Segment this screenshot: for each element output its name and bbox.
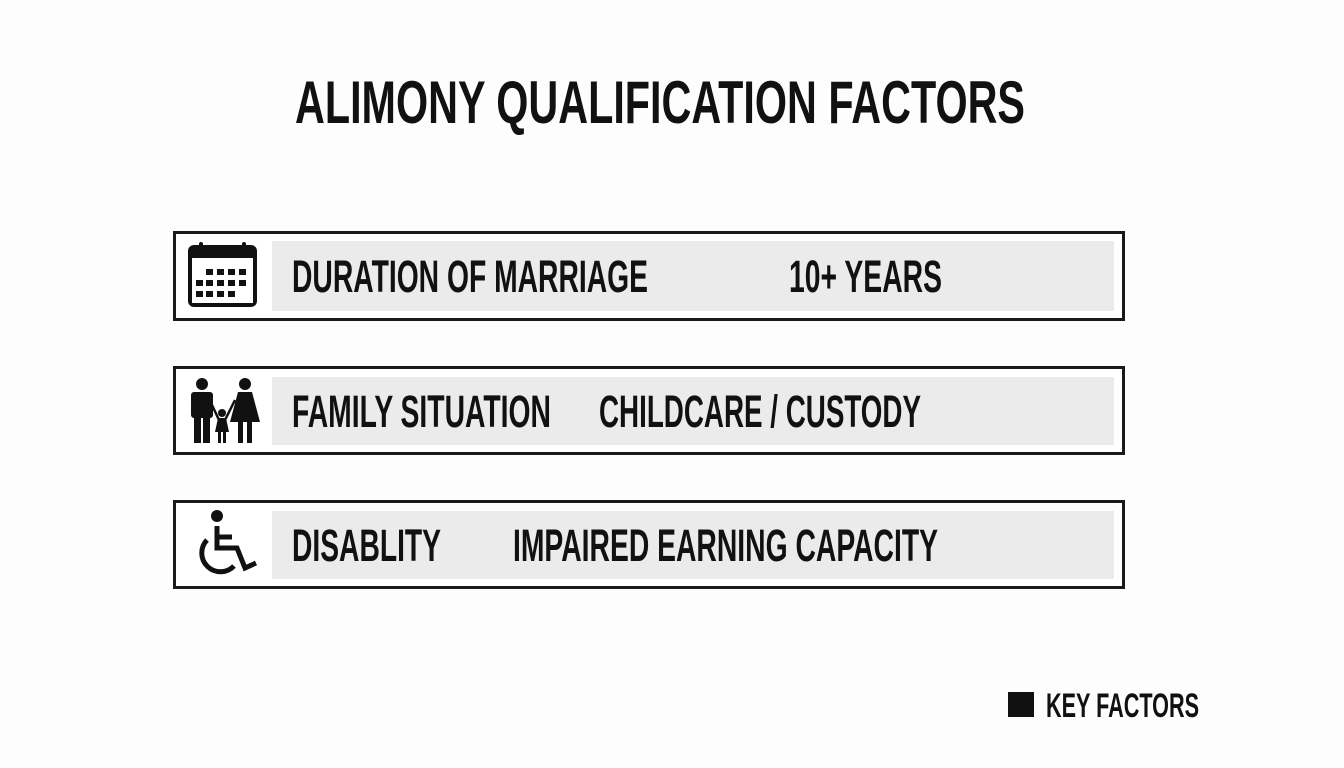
icon: calendar — [188, 242, 257, 307]
value: childcare: CHILDCARE / CUSTODY — [599, 386, 921, 437]
icon: family — [191, 378, 260, 443]
title: ALIMONY QUALIFICATION FACTORS — [295, 69, 1025, 136]
legend — [1008, 687, 1199, 725]
icon: wheelchair — [202, 510, 256, 572]
label: disability: DISABLITY — [292, 520, 441, 571]
value: 10+ years: 10+ YEARS — [789, 251, 942, 302]
legend: KEY FACTORS — [1046, 687, 1199, 725]
label: family: FAMILY SITUATION — [292, 386, 551, 437]
value: impaired: IMPAIRED EARNING CAPACITY — [513, 520, 938, 571]
label: duration: DURATION OF MARRIAGE — [292, 251, 648, 302]
panel: disability — [174, 502, 1124, 588]
panel: duration of marriage — [174, 232, 1124, 320]
panel: family situation — [174, 368, 1124, 454]
